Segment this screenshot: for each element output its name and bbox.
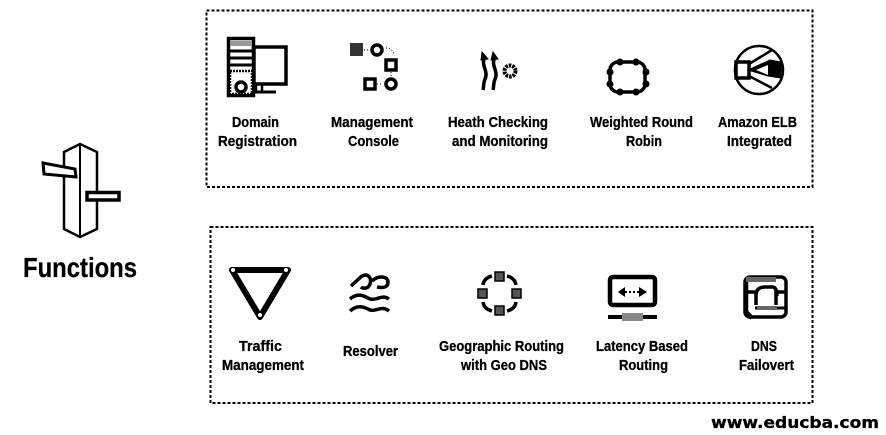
label: geographic routing: with Geo DNS [460,357,547,374]
label: dns failover: DNS [751,338,777,355]
label: management console: Management [331,114,413,131]
icon: functions door handle [43,144,119,237]
icon: latency based routing [608,277,657,321]
label: health checking: Heath Checking [448,114,548,131]
label: health checking: and Monitoring [452,133,548,150]
label: weighted round robin: Robin [626,133,662,150]
icon: domain registration [228,38,286,96]
label: dns failover: Failovert [739,357,794,374]
label: management console [331,114,413,150]
icon: traffic management [231,268,288,317]
panel: bottom functions [210,227,812,403]
icon: management console [350,43,396,89]
heading: functions: Functions [23,252,137,283]
label: geographic routing: Geographic Routing [439,338,564,355]
icon: weighted round robin [606,58,650,96]
label: latency based routing [596,338,688,374]
label: domain registration: Domain [232,114,279,131]
label: weighted round robin: Weighted Round [590,114,693,131]
icon: resolver [350,275,389,311]
icon: geographic routing [478,272,521,315]
label: amazon elb: Integrated [727,133,792,150]
label: domain registration: Registration [218,133,297,150]
icon: amazon elb [735,46,783,94]
label: amazon elb [718,114,797,150]
label: management console: Console [348,133,399,150]
label: traffic management: Management [222,357,304,374]
label: health checking [448,114,548,150]
icon: dns failover [745,277,786,318]
label: traffic management: Traffic [239,338,282,355]
watermark: website url: www.educba.com [711,413,879,432]
label: traffic management [222,338,304,374]
icon: health checking [481,52,516,90]
label: latency based routing: Routing [619,357,668,374]
label: domain registration [218,114,297,150]
label: resolver: Resolver [343,343,398,360]
label: dns failover [739,338,794,374]
label: weighted round robin [590,114,693,150]
label: geographic routing [439,338,564,374]
label: amazon elb: Amazon ELB [718,114,797,131]
panel: top functions [206,10,812,187]
label: latency based routing: Latency Based [596,338,688,355]
